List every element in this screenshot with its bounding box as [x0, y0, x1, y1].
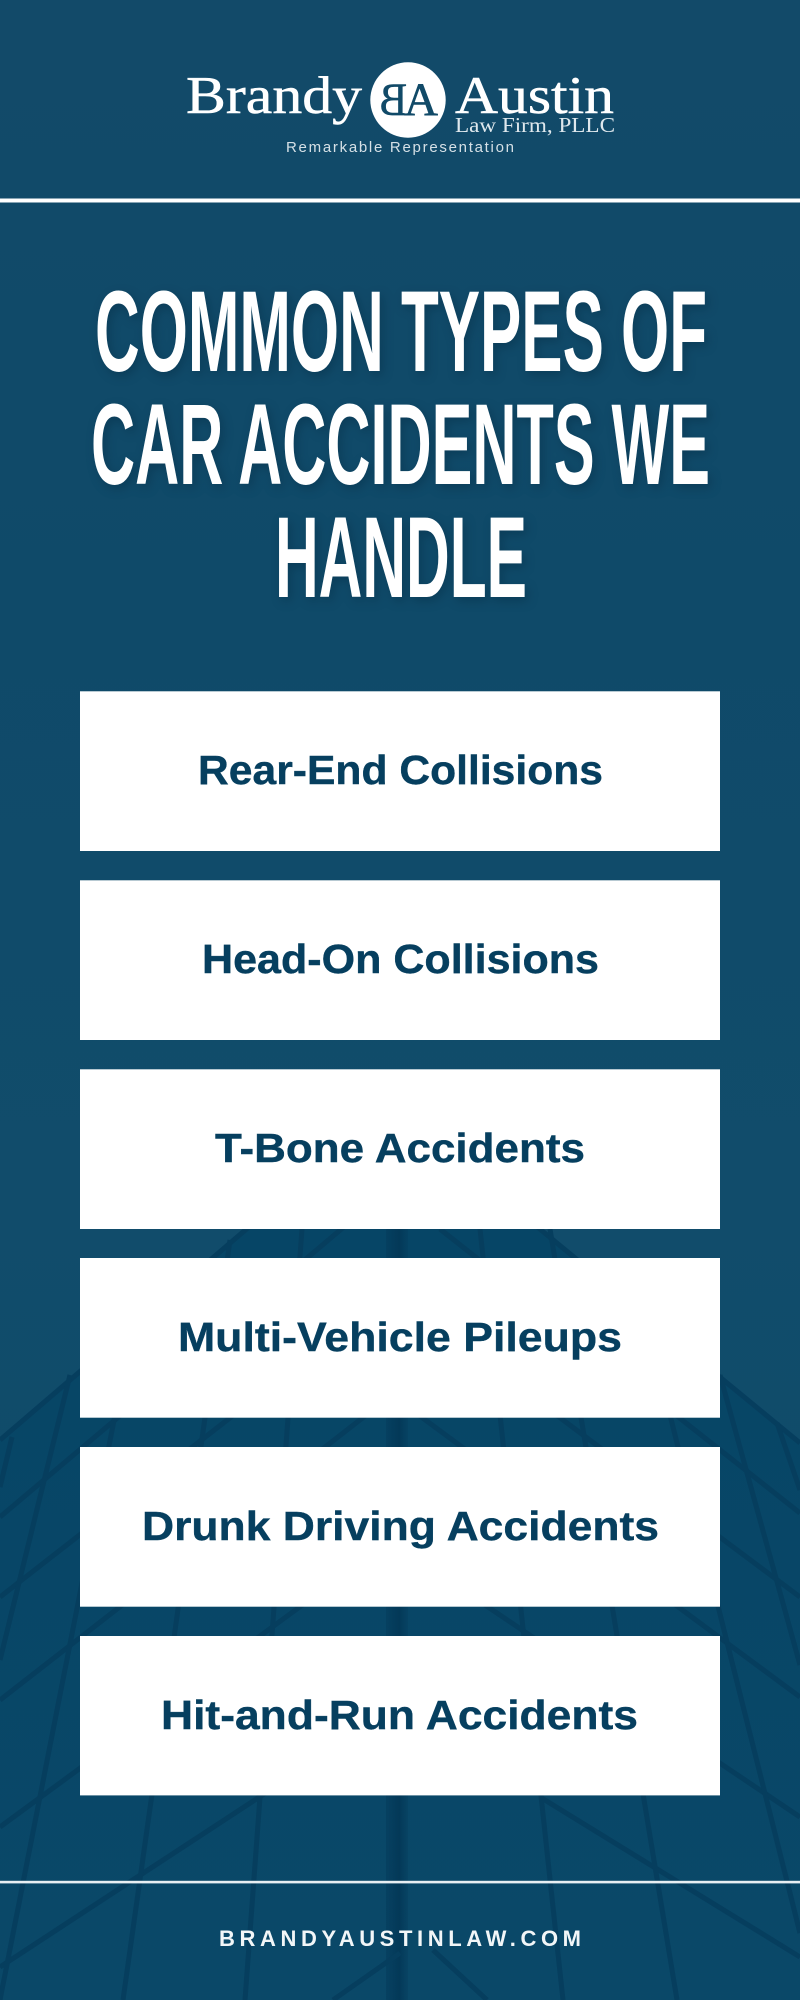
- footer divider: [0, 1881, 800, 1883]
- card: Multi-Vehicle Pileups: Multi-Vehicle Pileups: [178, 1314, 622, 1360]
- card: Multi-Vehicle Pileups: [80, 1258, 720, 1418]
- logo: [186, 62, 615, 156]
- card: Head-On Collisions: [80, 880, 720, 1040]
- card: Rear-End Collisions: Rear-End Collisions: [198, 747, 603, 793]
- logo tagline: Remarkable Representation: [286, 139, 514, 156]
- logo emblem: BA circle: B: [379, 74, 407, 126]
- logo wordmark: Austin: Austin: [455, 67, 614, 125]
- logo emblem: BA circle: A: [404, 74, 438, 126]
- card: Drunk Driving Accidents: [80, 1447, 720, 1607]
- title: HANDLE: [275, 494, 527, 622]
- card: Drunk Driving Accidents: Drunk Driving Accidents: [142, 1503, 659, 1549]
- card: T-Bone Accidents: [80, 1069, 720, 1229]
- title: [91, 268, 710, 622]
- logo subline: Law Firm, PLLC: Law Firm, PLLC: [455, 113, 615, 137]
- footer website: BRANDYAUSTINLAW.COM: [219, 1926, 581, 1951]
- card: Rear-End Collisions: [80, 691, 720, 851]
- logo emblem: BA circle: [370, 62, 446, 138]
- logo wordmark: Brandy: Brandy: [186, 67, 363, 125]
- card: T-Bone Accidents: T-Bone Accidents: [215, 1125, 585, 1171]
- header divider: [0, 198, 800, 202]
- card: Hit-and-Run Accidents: [80, 1636, 720, 1795]
- card: Hit-and-Run Accidents: Hit-and-Run Accidents: [161, 1692, 638, 1738]
- card: Head-On Collisions: Head-On Collisions: [202, 936, 599, 982]
